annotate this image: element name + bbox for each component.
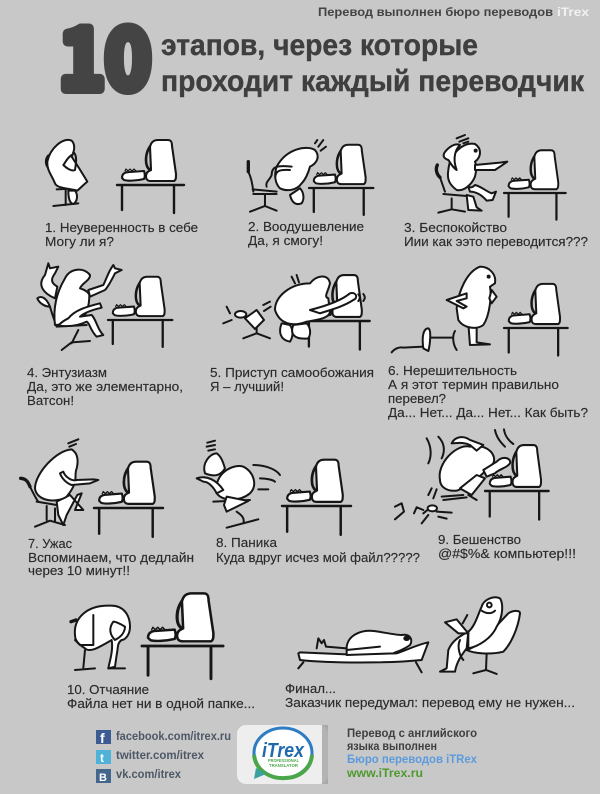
computer and desk <box>309 145 373 215</box>
panel: stage 6 <box>388 267 588 420</box>
computer and desk <box>504 150 566 220</box>
caption <box>27 365 183 408</box>
figure: translator scratching head <box>436 135 507 213</box>
link: facebook: facebook.com/itrex.ru <box>116 729 231 743</box>
caption: 7. Ужас <box>28 536 72 551</box>
caption <box>210 365 374 394</box>
caption: Вспоминаем, что дедлайн <box>28 550 194 565</box>
panel: final <box>285 597 575 710</box>
computer and desk <box>94 462 163 537</box>
caption: Финал... <box>285 681 336 696</box>
caption: Заказчик передумал: перевод ему не нужен... <box>285 695 575 710</box>
caption: Могу ли я? <box>45 234 114 249</box>
logo: iTrex badge: TRANSLATOR <box>269 763 298 768</box>
figure: translator arms raised <box>37 263 122 350</box>
caption: Да, я смогу! <box>248 233 323 248</box>
panel: stage 1 <box>45 140 198 249</box>
translation credit: Бюро переводов iTRex <box>347 752 477 766</box>
translation credit: языка выполнен <box>347 739 437 753</box>
logo: iTrex badge <box>237 725 328 784</box>
computer and desk <box>504 284 568 355</box>
title text <box>161 29 585 98</box>
figure: translator slumped <box>71 606 130 670</box>
caption: Да, это же элементарно, <box>27 379 183 394</box>
link: vk: vk.com/itrex <box>116 767 181 781</box>
translation credit: Перевод с английского <box>347 726 477 740</box>
figure: translator panicking <box>197 441 280 528</box>
caption <box>404 220 588 249</box>
caption: Файла нет ни в одной папке... <box>67 696 255 711</box>
caption: 5. Приступ самообожания <box>210 365 374 380</box>
caption: перевел? <box>388 391 446 406</box>
logo: iTrex badge: iTrex <box>262 740 305 762</box>
translation credit: www.iTrex.ru <box>346 766 423 780</box>
caption: 2. Воодушевление <box>248 219 364 234</box>
social links <box>96 729 231 784</box>
figure: translator leaning forward <box>248 140 326 212</box>
figure: translator horrified <box>21 439 98 527</box>
computer and desk <box>282 460 351 535</box>
figure: translator raging <box>395 429 513 523</box>
title text: проходит каждый переводчик <box>161 65 585 98</box>
translation credit <box>346 726 477 780</box>
credit line: iTrex <box>557 7 590 19</box>
panel: stage 5 <box>210 275 374 394</box>
figure: translator seated <box>47 140 87 206</box>
caption <box>216 535 420 565</box>
figure: psychologist in chair <box>440 597 520 674</box>
caption: Ватсон! <box>27 393 74 408</box>
caption: А я этот термин правильно <box>388 377 559 392</box>
caption <box>438 532 576 561</box>
title text: этапов, через которые <box>161 29 478 62</box>
panel: stage 4 <box>27 263 183 408</box>
caption: 9. Бешенство <box>438 532 521 547</box>
caption: 3. Беспокойство <box>404 220 507 235</box>
caption <box>388 363 588 420</box>
caption <box>285 681 575 710</box>
caption: через 10 минут!! <box>28 563 130 578</box>
caption <box>45 220 198 249</box>
caption: 4. Энтузиазм <box>27 365 107 380</box>
panel: stage 3 <box>404 135 588 249</box>
icon: facebook: f <box>100 730 105 746</box>
computer and desk <box>485 445 549 520</box>
panel: stage 9 <box>395 429 576 561</box>
caption: 6. Нерешительность <box>388 363 517 378</box>
caption: Куда вдруг исчез мой файл????? <box>216 550 420 565</box>
computer and desk <box>142 593 223 679</box>
caption: 1. Неуверенность в себе <box>45 220 198 235</box>
caption: 8. Паника <box>216 535 278 550</box>
icon: twitter: t <box>100 751 104 765</box>
caption <box>28 536 194 578</box>
computer and desk <box>304 275 370 350</box>
figure: translator standing beside tipped chair <box>392 267 497 352</box>
caption: 10. Отчаяние <box>67 682 149 697</box>
icon: vk: B <box>99 772 107 784</box>
panel: stage 10 <box>67 593 255 711</box>
computer and desk <box>108 277 172 347</box>
caption: Я – лучший! <box>210 379 284 394</box>
caption: Да... Нет... Да... Нет... Как быть? <box>388 405 588 420</box>
caption: Иии как ээто переводится??? <box>404 234 588 249</box>
computer and desk <box>117 140 184 213</box>
figure: patient on couch <box>298 631 428 672</box>
caption <box>248 219 364 248</box>
panel: stage 8 <box>197 441 420 565</box>
logo: iTrex badge: PROFESSIONAL <box>268 758 299 763</box>
panel: stage 7 <box>21 439 194 578</box>
credit line: Перевод выполнен бюро переводов <box>318 7 553 19</box>
link: twitter: twitter.com/itrex <box>116 748 204 762</box>
caption: @#$%& компьютер!!! <box>438 546 576 561</box>
title <box>59 0 585 114</box>
figure: translator hugging monitor <box>223 275 365 342</box>
caption <box>67 682 255 711</box>
panel: stage 2 <box>248 140 373 248</box>
